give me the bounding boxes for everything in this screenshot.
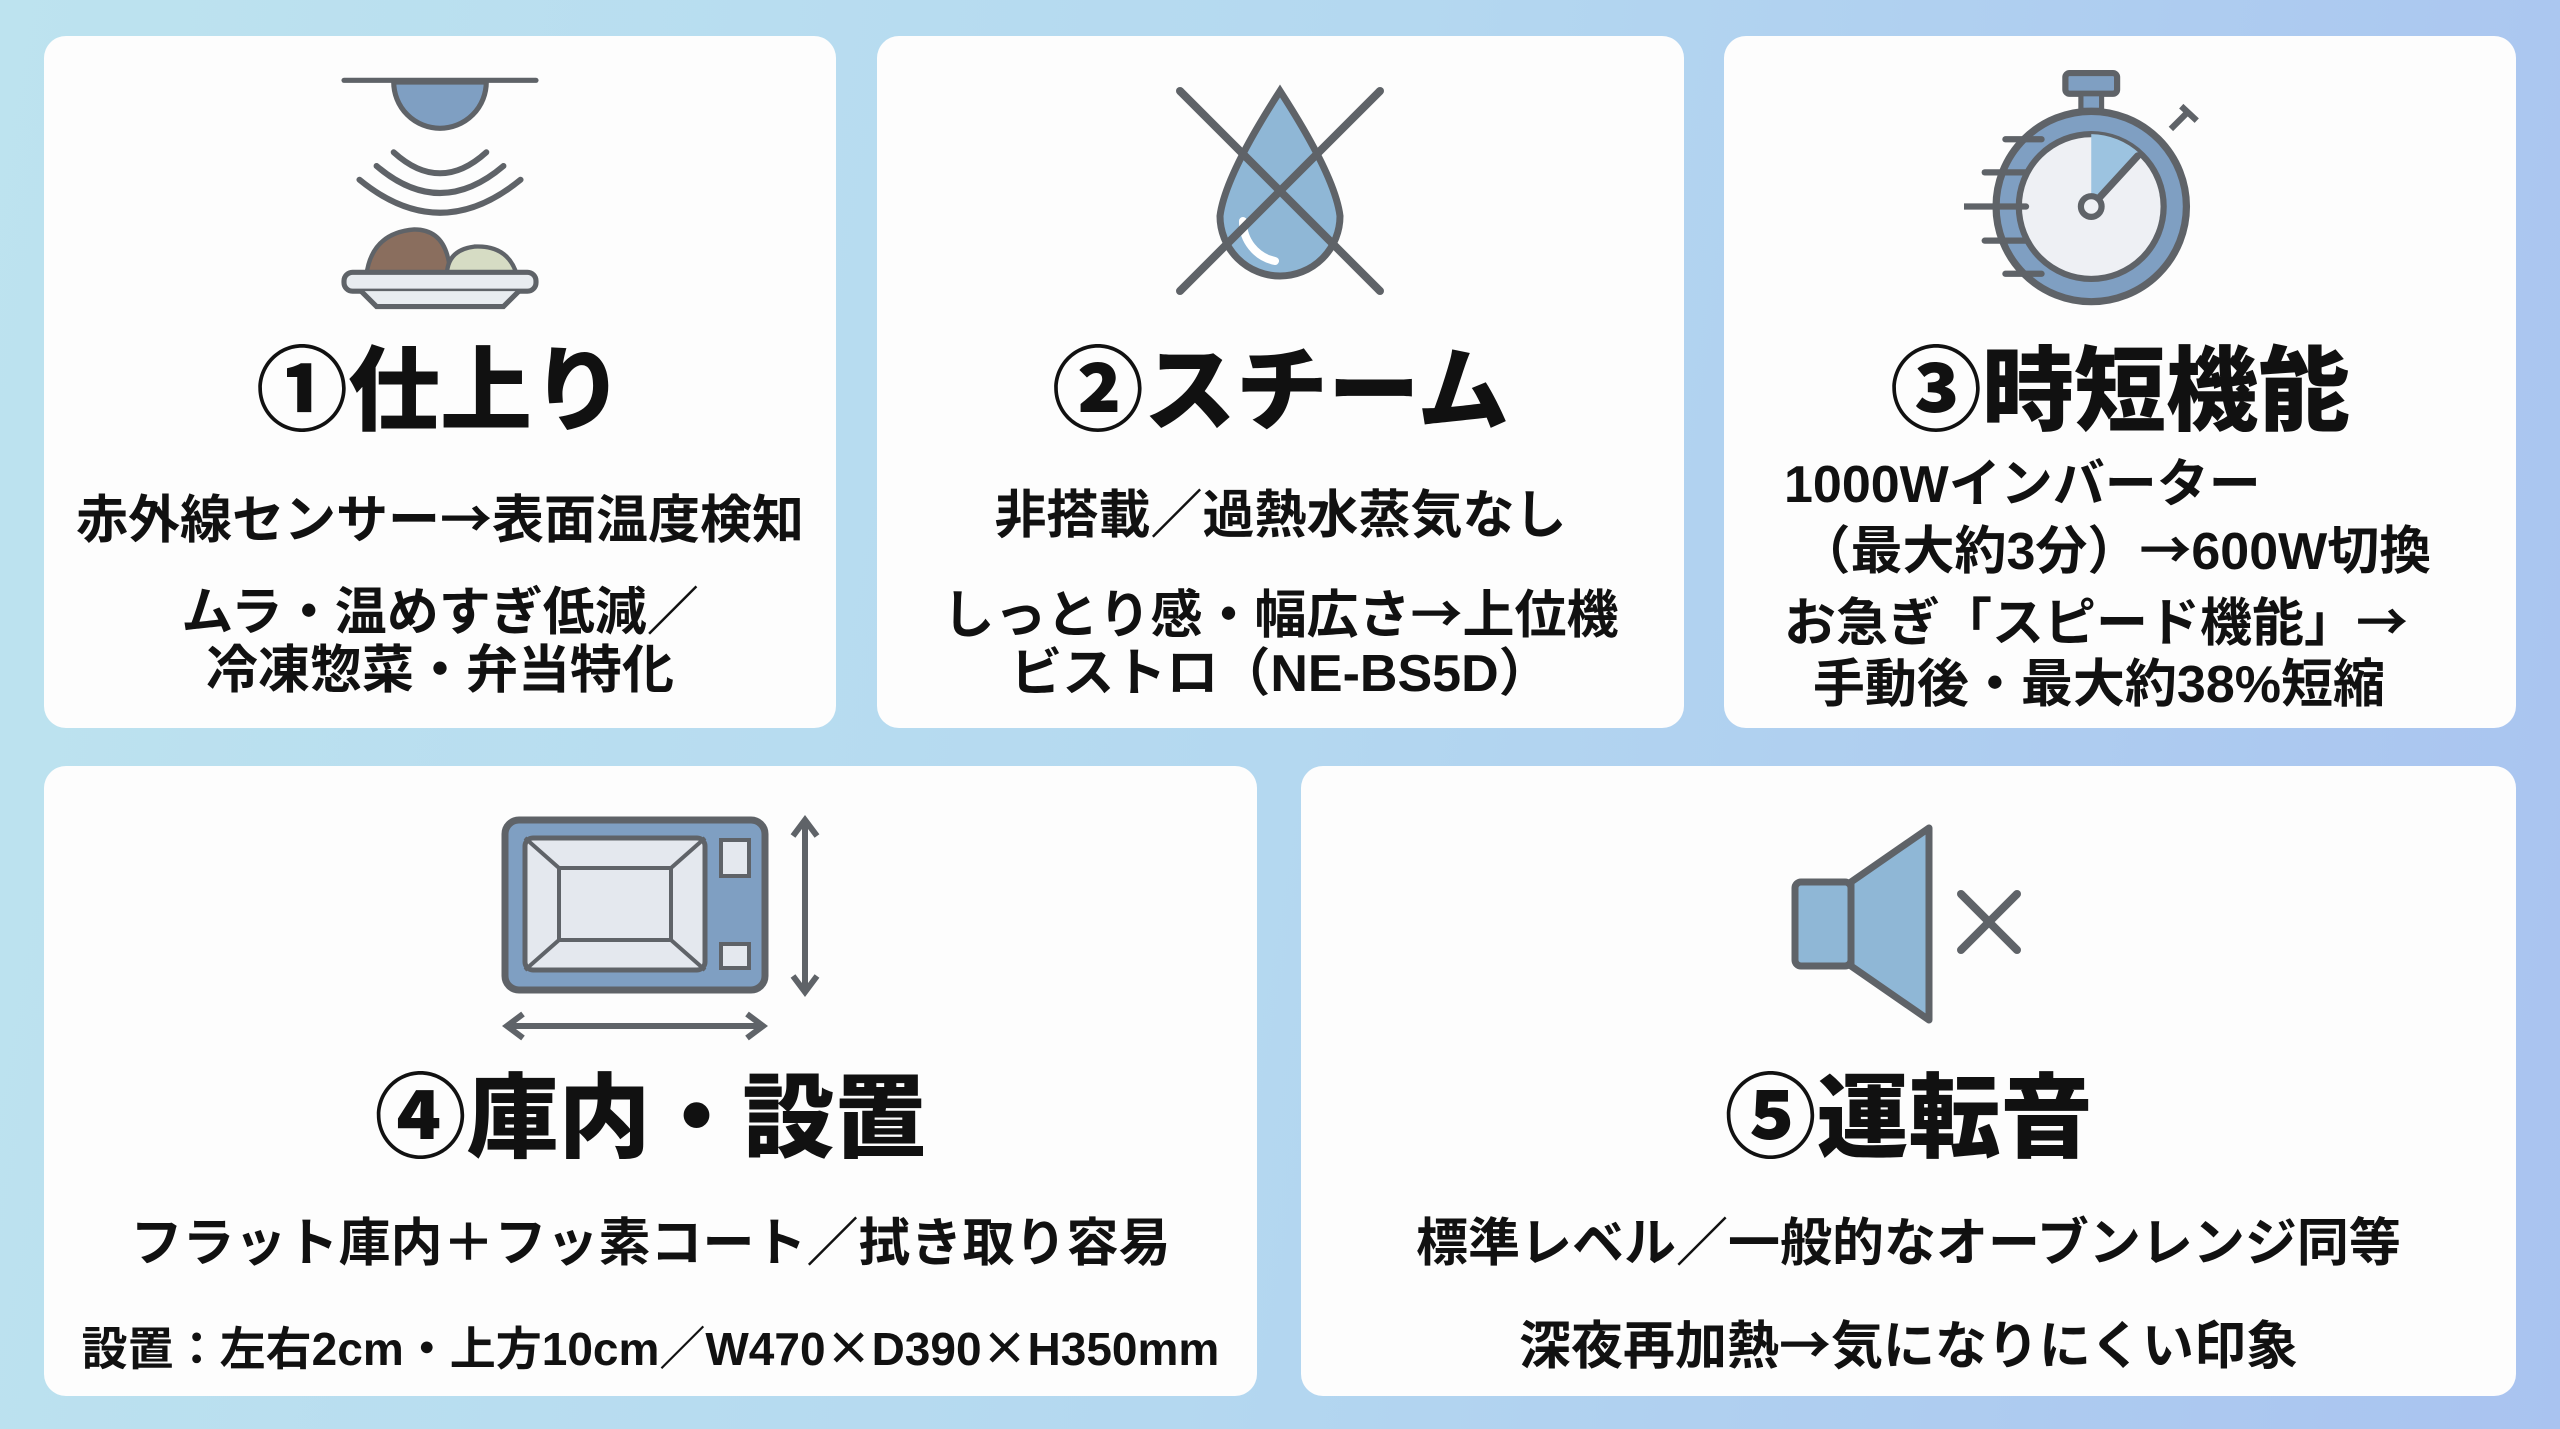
text block: ムラ・温めすぎ低減／ [181, 584, 699, 642]
text block [181, 584, 699, 700]
heading: ③時短機能 [1890, 341, 2350, 443]
text block: （最大約3分）→600W切換 [1798, 509, 2431, 584]
text block: ビストロ（NE-BS5D） [1010, 645, 1551, 703]
text block [1784, 581, 2408, 714]
heading: ⑤運転音 [1724, 1068, 2092, 1170]
text block: 手動後・最大約38%短縮 [1813, 656, 2385, 714]
text block: フラット庫内＋フッ素コート／拭き取り容易 [130, 1215, 1170, 1273]
heading: ①仕上り [256, 341, 624, 443]
heading: ④庫内・設置 [374, 1068, 926, 1170]
text block [942, 573, 1619, 703]
icon: muted speaker [1792, 824, 2021, 1024]
text block: 冷凍惣菜・弁当特化 [206, 642, 674, 700]
text block: 1000Wインバーター [1784, 456, 2261, 514]
text block: お急ぎ「スピード機能」→ [1784, 581, 2408, 656]
text block: 設置：左右2cm・上方10cm／W470×D390×H350mm [82, 1313, 1219, 1379]
panel: finish [44, 36, 836, 728]
panel: operating noise [1301, 766, 2516, 1396]
text block [1784, 456, 2431, 584]
icon: microwave with dimensions [502, 815, 820, 1040]
icon: stopwatch [1964, 70, 2199, 306]
panel: time saving [1724, 36, 2516, 728]
icon: sensor and plate [341, 78, 539, 310]
icon: crossed water drop [1176, 84, 1384, 295]
text block: しっとり感・幅広さ→上位機 [942, 573, 1619, 648]
text block: 非搭載／過熱水蒸気なし [994, 487, 1566, 545]
panel: interior and installation [44, 766, 1257, 1396]
text block: 赤外線センサー→表面温度検知 [76, 478, 804, 553]
panel: steam [877, 36, 1684, 728]
text block: 深夜再加熱→気になりにくい印象 [1519, 1304, 2298, 1379]
text block: 標準レベル／一般的なオーブンレンジ同等 [1416, 1215, 2401, 1273]
heading: ②スチーム [1052, 341, 1509, 443]
